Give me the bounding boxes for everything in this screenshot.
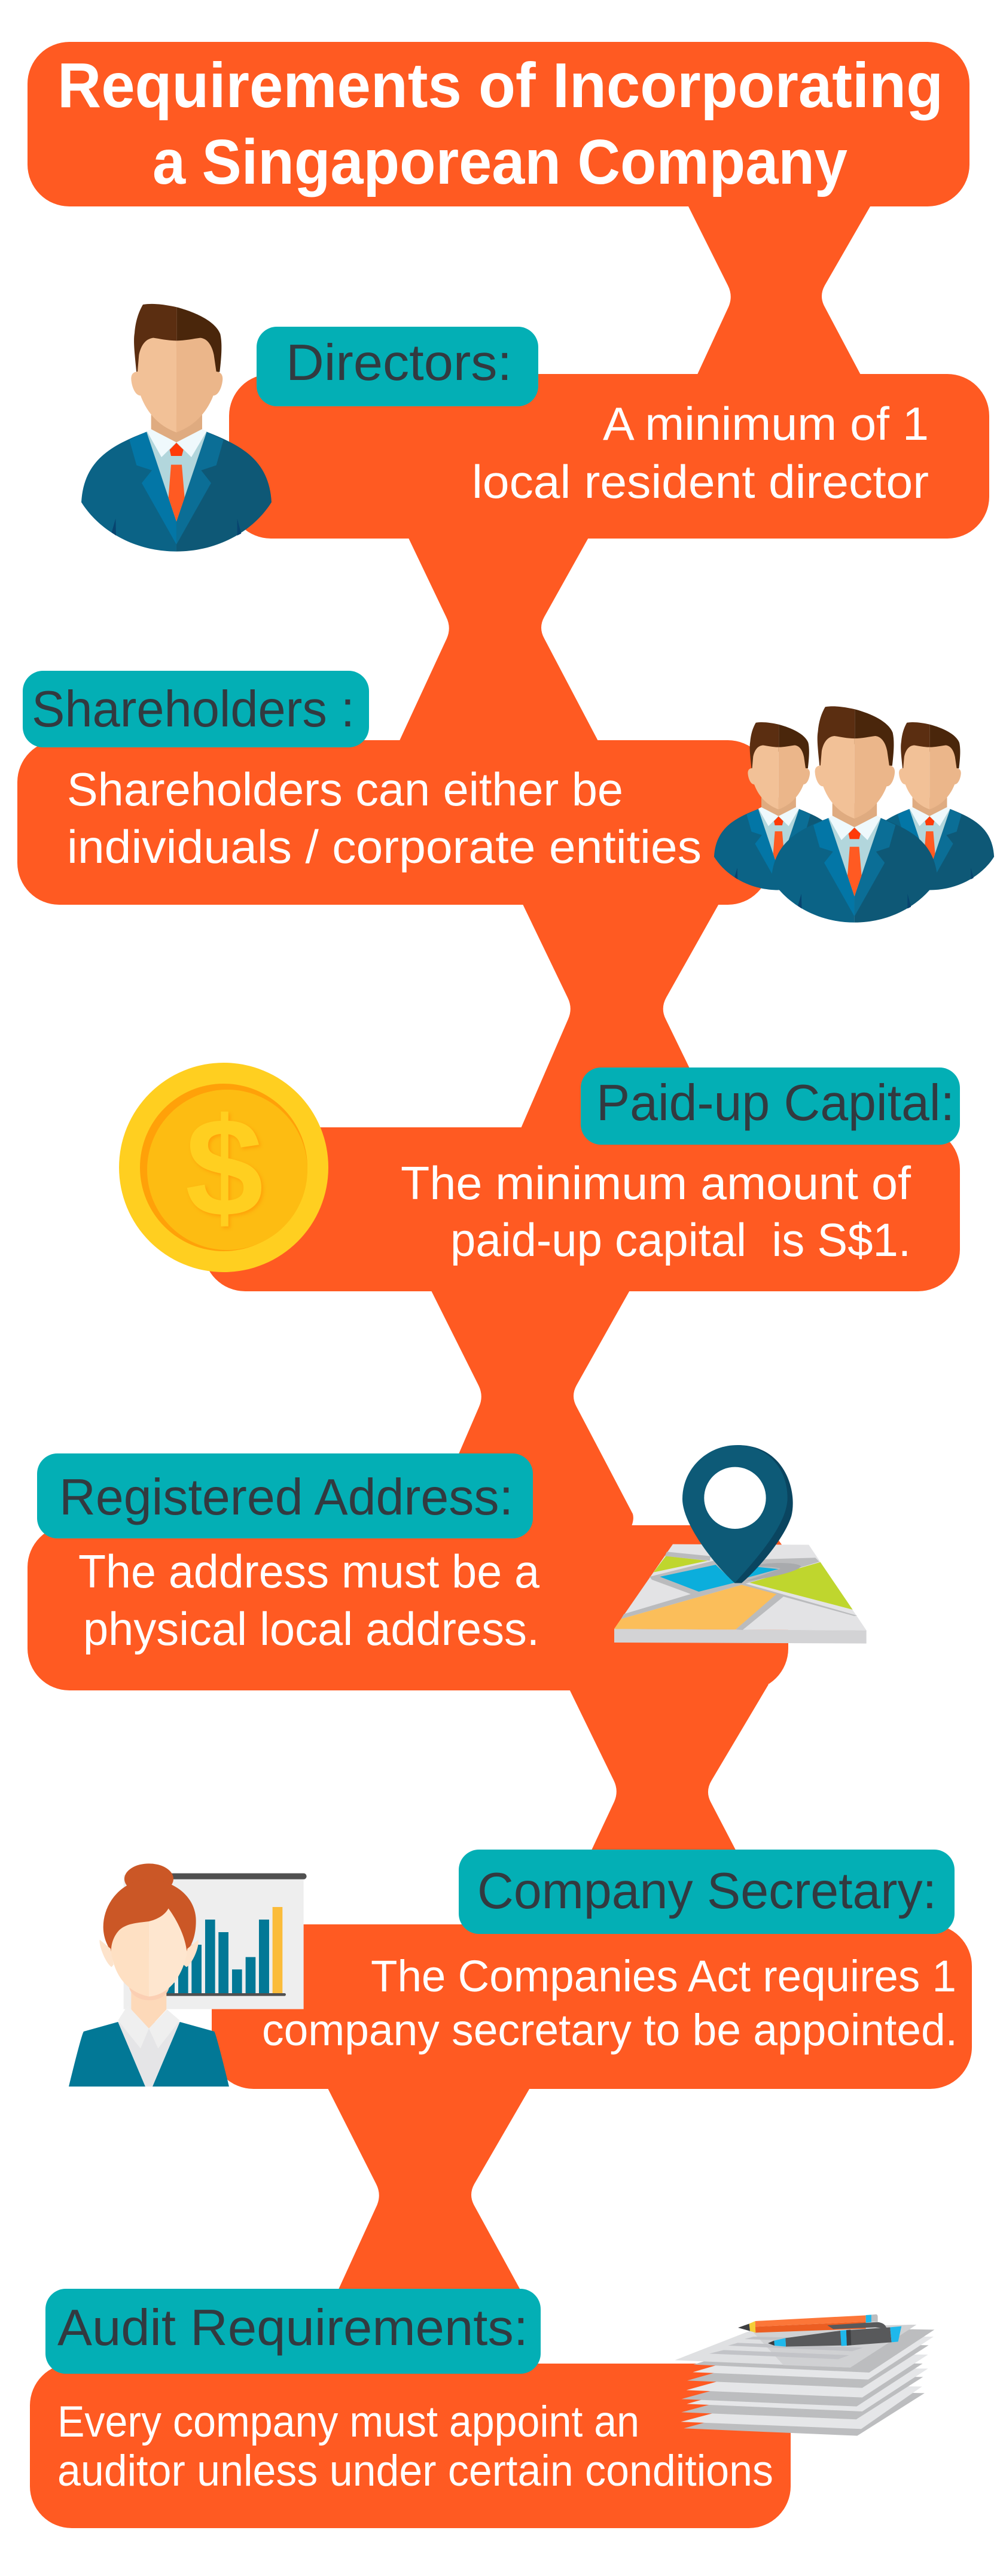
panel: audit requirements: [30, 2289, 791, 2528]
tag: paid-up capital: [581, 1067, 960, 1145]
pen: [768, 2322, 901, 2347]
audit text line 2: auditor unless under certain conditions: [57, 2447, 773, 2495]
connector: directors to shareholders: [398, 536, 599, 743]
woman: [69, 2022, 145, 2087]
tag: company secretary: [459, 1850, 955, 1934]
tag text: audit requirements: Audit Requirements:: [57, 2300, 528, 2356]
connector: paid-up capital to registered address: [426, 1288, 633, 1529]
panel: paid-up capital: [203, 1067, 960, 1291]
icon: map and location pin: [614, 1445, 867, 1644]
shareholders text line 2: individuals / corporate entities: [67, 820, 702, 873]
directors text line 2: local resident director: [472, 455, 929, 508]
connector: shareholders to paid-up capital: [520, 902, 720, 1131]
panel: registered address: [28, 1453, 788, 1690]
audit text line 1: Every company must appoint an: [57, 2398, 639, 2446]
location pin: [734, 1445, 793, 1583]
icon: director man: [81, 304, 272, 552]
shareholders text line 1: Shareholders can either be: [67, 763, 623, 816]
panel: title: [28, 42, 969, 206]
title line 1: Requirements of Incorporating: [57, 50, 943, 121]
icon: gold coin: [119, 1063, 328, 1272]
connector: company secretary to audit requirements: [303, 2086, 531, 2367]
secretary text line 1: The Companies Act requires 1: [371, 1951, 956, 2001]
paid-up text line 1: The minimum amount of: [401, 1157, 911, 1209]
icon: paper stack with pencil and pen: [675, 2315, 934, 2436]
tag: shareholders: [23, 671, 369, 747]
tag: directors: [257, 327, 538, 406]
paid-up text line 2: paid-up capital is S$1.: [450, 1214, 911, 1266]
connector: title to directors: [688, 206, 870, 377]
title line 2: a Singaporean Company: [153, 127, 847, 197]
bar chart: [164, 1907, 282, 1994]
pencil: [738, 2315, 878, 2332]
panel: company secretary: [212, 1850, 972, 2089]
presentation board: [124, 1875, 304, 2009]
panel: directors: [229, 327, 989, 539]
icon: secretary and chart: [69, 1863, 304, 2087]
directors text line 1: A minimum of 1: [603, 397, 929, 450]
tag text: directors: Directors:: [286, 334, 512, 391]
tag text: registered address: Registered Address:: [59, 1469, 513, 1526]
dollar sign: $: [185, 1088, 263, 1246]
address text line 2: physical local address.: [83, 1602, 539, 1655]
tag: audit requirements: [45, 2289, 541, 2374]
tag text: company secretary: Company Secretary:: [477, 1863, 937, 1920]
tag text: shareholders: Shareholders :: [32, 681, 355, 738]
tag: registered address: [37, 1453, 533, 1538]
connector: registered address to company secretary: [555, 1684, 776, 1928]
secretary text line 2: company secretary to be appointed.: [262, 2005, 958, 2055]
address text line 1: The address must be a: [78, 1545, 540, 1598]
tag text: paid-up capital: Paid-up Capital:: [596, 1075, 955, 1132]
icon: three shareholders: [714, 706, 994, 923]
panel: shareholders: [17, 671, 770, 905]
